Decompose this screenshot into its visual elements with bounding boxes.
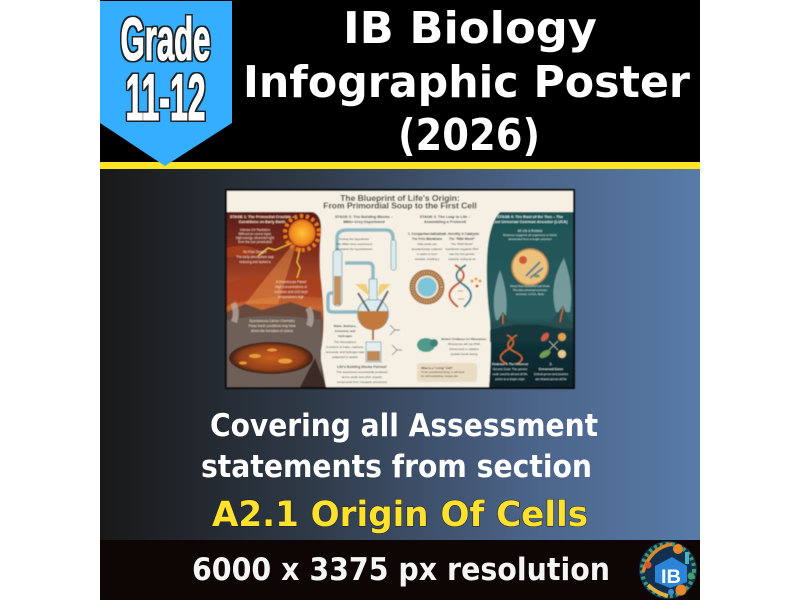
stage 3: assembling a protocell: The First Membrane	[412, 237, 442, 241]
title	[243, 3, 690, 161]
coverage text	[201, 408, 598, 485]
stage 1: primordial crucible: These harsh conditions may have	[248, 324, 296, 328]
stage 1: primordial crucible: methane and CO2 kept	[275, 290, 308, 294]
stage 4: LUCA: Last Universal Common Ancestor (LUCA)	[493, 220, 568, 224]
stage 2: Miller-Urey experiment: The Miller-Urey experiment	[336, 242, 372, 246]
stage 3: assembling a protocell: material, acting as an	[448, 257, 476, 261]
stage 2: Miller-Urey experiment: STAGE 2: The Building Blocks –	[335, 215, 393, 219]
stage 2: Miller-Urey experiment: The Atmosphere	[334, 340, 356, 344]
coverage text: Covering all Assessment	[210, 408, 598, 444]
stage 3: assembling a protocell: hypothesis suggests RNA	[445, 247, 479, 251]
stage 4: LUCA: Genetic Code: The genetic	[493, 367, 528, 371]
stage 1: primordial crucible: STAGE 1: The Primordial Crucible –	[230, 215, 294, 219]
stage 4: LUCA: are shared across all life	[535, 377, 567, 381]
stage 4: LUCA: The last universal common	[513, 288, 548, 292]
stage 3: assembling a protocell: in water to form	[417, 252, 438, 256]
grade badge: 11-12	[126, 60, 206, 134]
stage 2: Miller-Urey experiment	[326, 215, 402, 384]
grade badge: Grade	[120, 6, 210, 73]
stage 2: Miller-Urey experiment: Testing the Hypothesis	[339, 237, 370, 241]
stage 1: primordial crucible: driven the formation of carbon	[251, 329, 293, 333]
stage 3: assembling a protocell: Ribosomes still use RNA	[448, 342, 480, 346]
stage 1: primordial crucible: temperatures high	[278, 295, 304, 299]
stage 3: assembling a protocell: spontaneously coalesce	[412, 247, 443, 251]
stage 4: LUCA: points to a single origin	[495, 377, 525, 381]
stage 3: assembling a protocell: What is a "Living" Cell?	[421, 366, 453, 370]
stage 2: Miller-Urey experiment: ammonia, and hydrogen was	[326, 350, 365, 354]
stage 3: assembling a protocell: Modern Evidence for Ribozymes:	[441, 337, 487, 341]
stage 1: primordial crucible: Conditions on Early Earth	[239, 220, 286, 224]
stage 1: primordial crucible: reducing and lacked a	[239, 260, 271, 264]
stage 3: assembling a protocell: be self-sustaining; viruses are	[421, 374, 458, 378]
title: Infographic Poster	[243, 57, 690, 108]
background panel	[100, 169, 700, 541]
stage 2: Miller-Urey experiment: Life's Building Blocks Formed!	[337, 365, 387, 369]
stage 2: Miller-Urey experiment: Water, Methane,	[334, 324, 357, 328]
stage 2: Miller-Urey experiment: subjected to sparks	[332, 355, 358, 359]
coverage text: statements from section	[201, 449, 592, 485]
stage 3: assembling a protocell: 1. Compartmentalization:	[408, 232, 446, 236]
title: IB Biology	[343, 3, 597, 54]
stage 2: Miller-Urey experiment: A mixture of water, methane,	[326, 345, 364, 349]
stage 2: Miller-Urey experiment: amino acids and other organic	[342, 375, 383, 379]
stage 2: Miller-Urey experiment: Miller-Urey Experiment	[343, 220, 385, 224]
yellow divider	[100, 162, 700, 169]
stage 1: primordial crucible: A Greenhouse Planet	[276, 280, 306, 284]
stage 4: LUCA: descended from a single ancestor	[508, 237, 552, 241]
stage 3: assembling a protocell: The "RNA World"	[451, 242, 473, 246]
stage 3: assembling a protocell: To be considered living, a cell must	[421, 370, 465, 374]
stage 4: LUCA: ancestor, LUCA, likely	[516, 292, 545, 296]
poster heading: The Blueprint of Life's Origin:	[340, 193, 460, 203]
poster preview	[225, 189, 575, 389]
stage 1: primordial crucible: The early atmosphere was	[236, 255, 274, 259]
title: (2026)	[398, 110, 540, 161]
stage 4: LUCA: Critical genes and proteins	[534, 372, 569, 376]
stage 2: Miller-Urey experiment: Hydrogen	[338, 334, 352, 338]
stage 3: assembling a protocell: The "RNA World"	[449, 237, 476, 241]
stage 1: primordial crucible: No Free Oxygen	[243, 250, 267, 254]
stage 4: LUCA: Deep-Sea Hydrothermal Vents	[510, 284, 550, 288]
section name: A2.1 Origin Of Cells	[212, 495, 588, 535]
stage 3: assembling a protocell: was the first genetic	[449, 252, 475, 256]
stage 3: assembling a protocell: Assembling a Protocell	[424, 220, 466, 224]
icon: IB logo: IB	[661, 567, 681, 588]
stage 3: assembling a protocell: 2. Heredity & Catalysis:	[444, 232, 480, 236]
stage 3: assembling a protocell: Fatty acids can	[417, 242, 437, 246]
stage 1: primordial crucible: Spontaneous Carbon Chemistry	[249, 319, 295, 323]
stage 2: Miller-Urey experiment: The experiment successfully produced	[336, 370, 388, 374]
header band	[100, 0, 700, 163]
stage 3: assembling a protocell: STAGE 3: The Leap to Life –	[420, 215, 470, 219]
stage 4: LUCA: STAGE 4: The Root of the Tree – The	[497, 215, 563, 219]
grade badge	[100, 1, 232, 166]
stage 4: LUCA: 2.	[550, 362, 552, 366]
icon: IB logo	[639, 541, 697, 599]
stage 4: LUCA: Evidence suggests all organisms on Earth	[503, 233, 557, 237]
stage 4: LUCA	[487, 212, 573, 387]
stage 2: Miller-Urey experiment: compounds from inorganic precursors	[337, 380, 388, 384]
stage 4: LUCA: All Life is Related	[518, 229, 543, 233]
stage 4: LUCA: Conserved Genes	[539, 367, 564, 371]
poster heading	[323, 193, 477, 210]
stage 1: primordial crucible: Intense UV Radiation	[240, 228, 270, 232]
stage 2: Miller-Urey experiment: Ammonia, and	[335, 329, 356, 333]
stage 3: assembling a protocell: vesicles, creating a	[415, 257, 440, 261]
stage 1: primordial crucible: high-energy ultraviolet light	[236, 236, 274, 240]
stage 4: LUCA: code used by almost all life	[493, 372, 528, 376]
stage 4: LUCA: Evidence 1: The Universal	[492, 362, 528, 366]
stage 3: assembling a protocell: peptide bonds during	[450, 352, 478, 356]
stage 3: assembling a protocell: (ribozymes) to catalyse	[449, 347, 479, 351]
stage 1: primordial crucible	[227, 212, 326, 387]
resolution text: 6000 x 3375 px resolution	[192, 552, 610, 588]
stage 1: primordial crucible: Without an ozone layer,	[238, 232, 272, 236]
stage 2: Miller-Urey experiment: simulated the hypothesized	[336, 247, 373, 251]
stage 3: assembling a protocell	[408, 215, 487, 382]
stage 1: primordial crucible: High concentrations of	[275, 285, 307, 289]
footer band	[100, 540, 700, 600]
poster heading: From Primordial Soup to the First Cell	[323, 200, 477, 210]
stage 1: primordial crucible: from the sun penetrated	[238, 240, 272, 244]
